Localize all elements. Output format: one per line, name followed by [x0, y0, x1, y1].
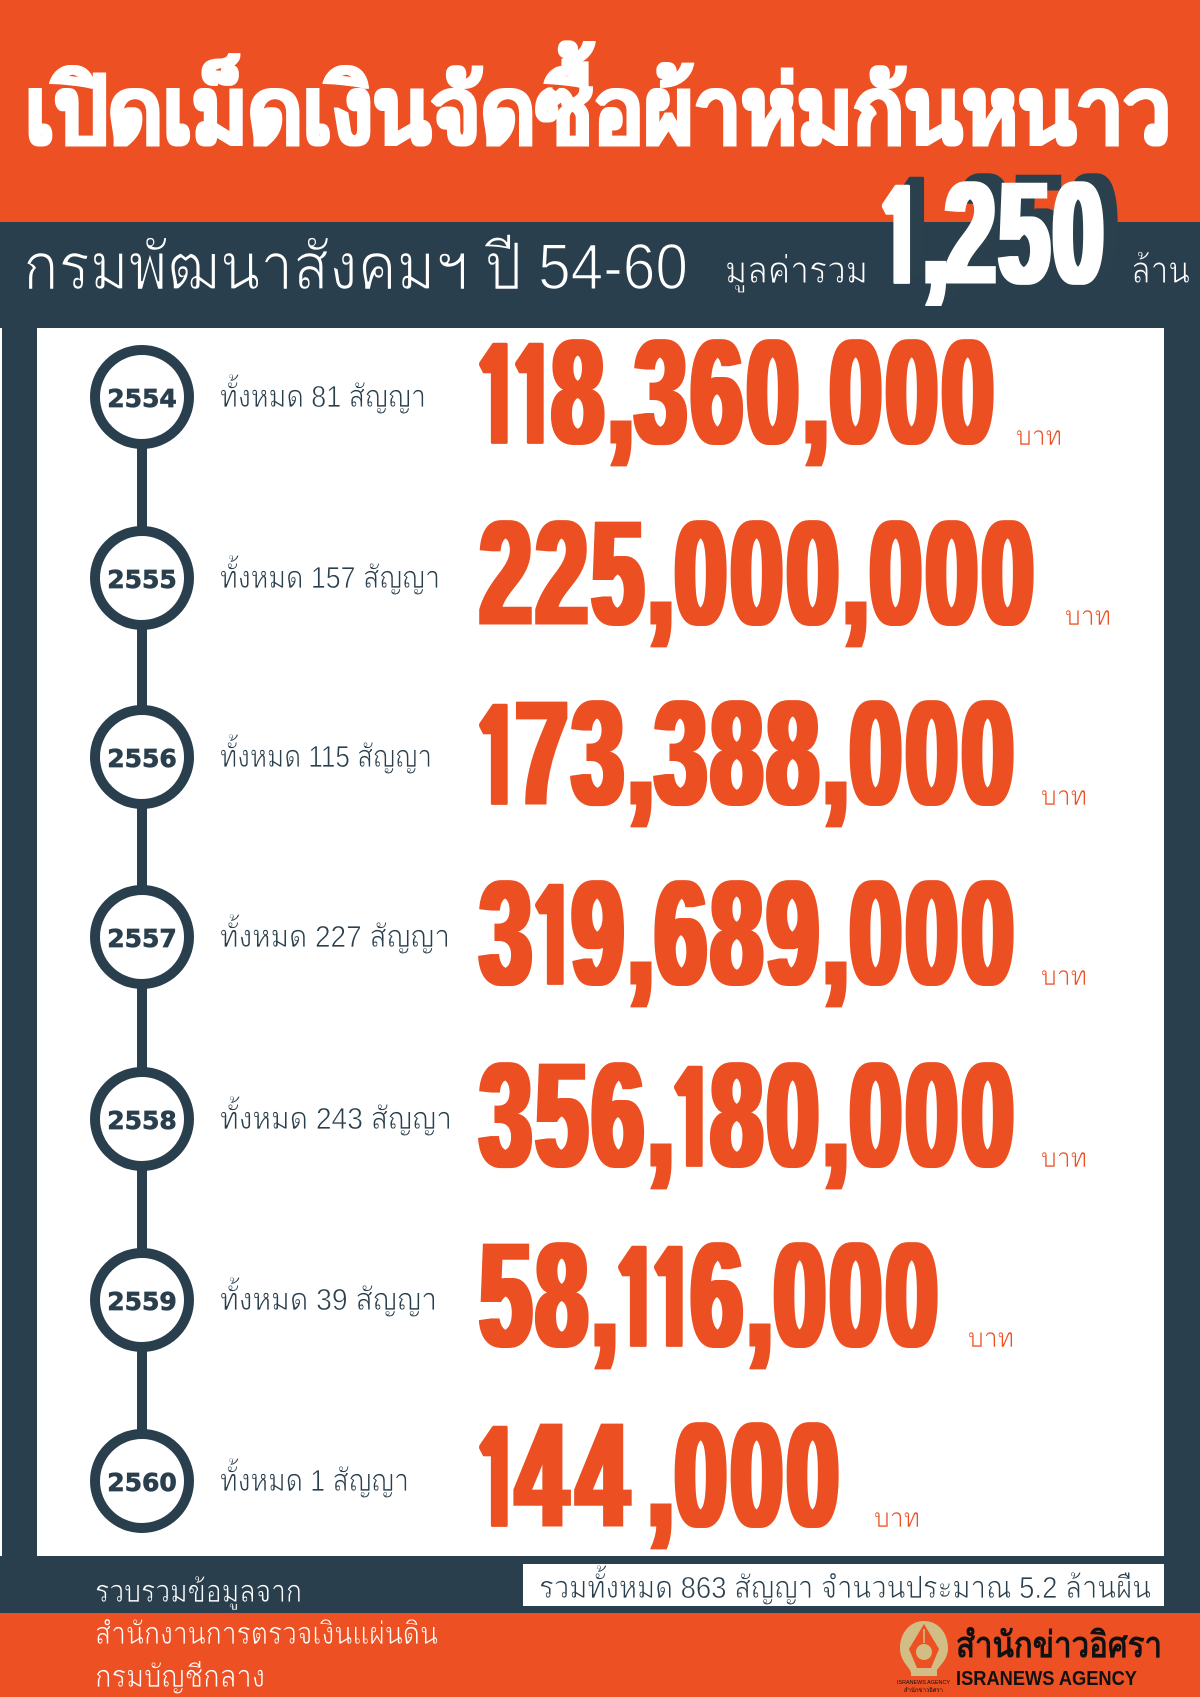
row 2556: บาท: [1041, 781, 1087, 811]
row 2557: ทั้งหมด 227 สัญญา: [220, 914, 450, 954]
source text: สำนักงานการตรวจเงินแผ่นดิน: [95, 1616, 438, 1651]
logo: ISRANEWS AGENCY: [956, 1668, 1138, 1690]
row 2556: ทั้งหมด 115 สัญญา: [220, 734, 432, 774]
left sliver: [0, 328, 2, 1556]
row 2558: [95, 1033, 1087, 1198]
row 2557: 319,689,000: [480, 851, 1013, 1016]
logo: สำนักข่าวอิศรา: [956, 1624, 1162, 1665]
row 2555: 2555: [107, 565, 177, 594]
panel: timeline: [37, 310, 1164, 1558]
row 2557: [95, 851, 1087, 1016]
row 2558: บาท: [1041, 1143, 1087, 1173]
row 2557: 2557: [107, 924, 177, 953]
row 2559: ทั้งหมด 39 สัญญา: [220, 1277, 437, 1317]
total label: มูลค่ารวม: [725, 250, 868, 293]
row 2555: ทั้งหมด 157 สัญญา: [220, 555, 440, 595]
header band: [0, 0, 1200, 222]
row 2559: [95, 1213, 1014, 1378]
total value shadow: 1,250: [890, 144, 1117, 306]
row 2556: 173,388,000: [473, 671, 1013, 836]
row 2560: ทั้งหมด 1 สัญญา: [220, 1458, 409, 1498]
row 2554: บาท: [1016, 421, 1062, 451]
logo: ISRANEWS AGENCY: [897, 1680, 951, 1686]
row 2560: 2560: [107, 1468, 177, 1497]
row 2556: [95, 671, 1087, 836]
row 2554: [95, 310, 1062, 475]
row 2555: [95, 491, 1111, 656]
total unit: ล้าน: [1131, 250, 1190, 292]
row 2558: 2558: [107, 1106, 177, 1135]
row 2558: ทั้งหมด 243 สัญญา: [220, 1096, 452, 1136]
row 2560: บาท: [874, 1503, 920, 1533]
row 2554: 2554: [107, 384, 177, 413]
footer band: [0, 1613, 1200, 1697]
row 2555: บาท: [1065, 601, 1111, 631]
timeline connector: [137, 397, 147, 1481]
logo: สำนักข่าวอิศรา: [904, 1687, 943, 1694]
row 2556: 2556: [107, 744, 177, 773]
row 2554: 118,360,000: [473, 310, 993, 475]
source text: รวบรวมข้อมูลจาก: [95, 1574, 302, 1610]
row 2560: [95, 1393, 920, 1558]
row 2558: 356,180,000: [480, 1033, 1013, 1198]
row 2560: 144,000: [473, 1393, 838, 1558]
row 2554: ทั้งหมด 81 สัญญา: [220, 374, 426, 414]
source text: กรมบัญชีกลาง: [95, 1659, 265, 1694]
source text: [95, 1574, 438, 1694]
logo: [897, 1621, 1162, 1694]
row 2559: 58,116,000: [480, 1213, 937, 1378]
row 2559: บาท: [968, 1323, 1014, 1353]
subtitle: กรมพัฒนาสังคมฯ ปี 54-60: [23, 230, 688, 303]
row 2559: 2559: [107, 1287, 177, 1316]
icon: pen nib: [900, 1621, 948, 1676]
row 2555: 225,000,000: [480, 491, 1033, 656]
total value: 1,250: [876, 152, 1103, 314]
row 2557: บาท: [1041, 961, 1087, 991]
